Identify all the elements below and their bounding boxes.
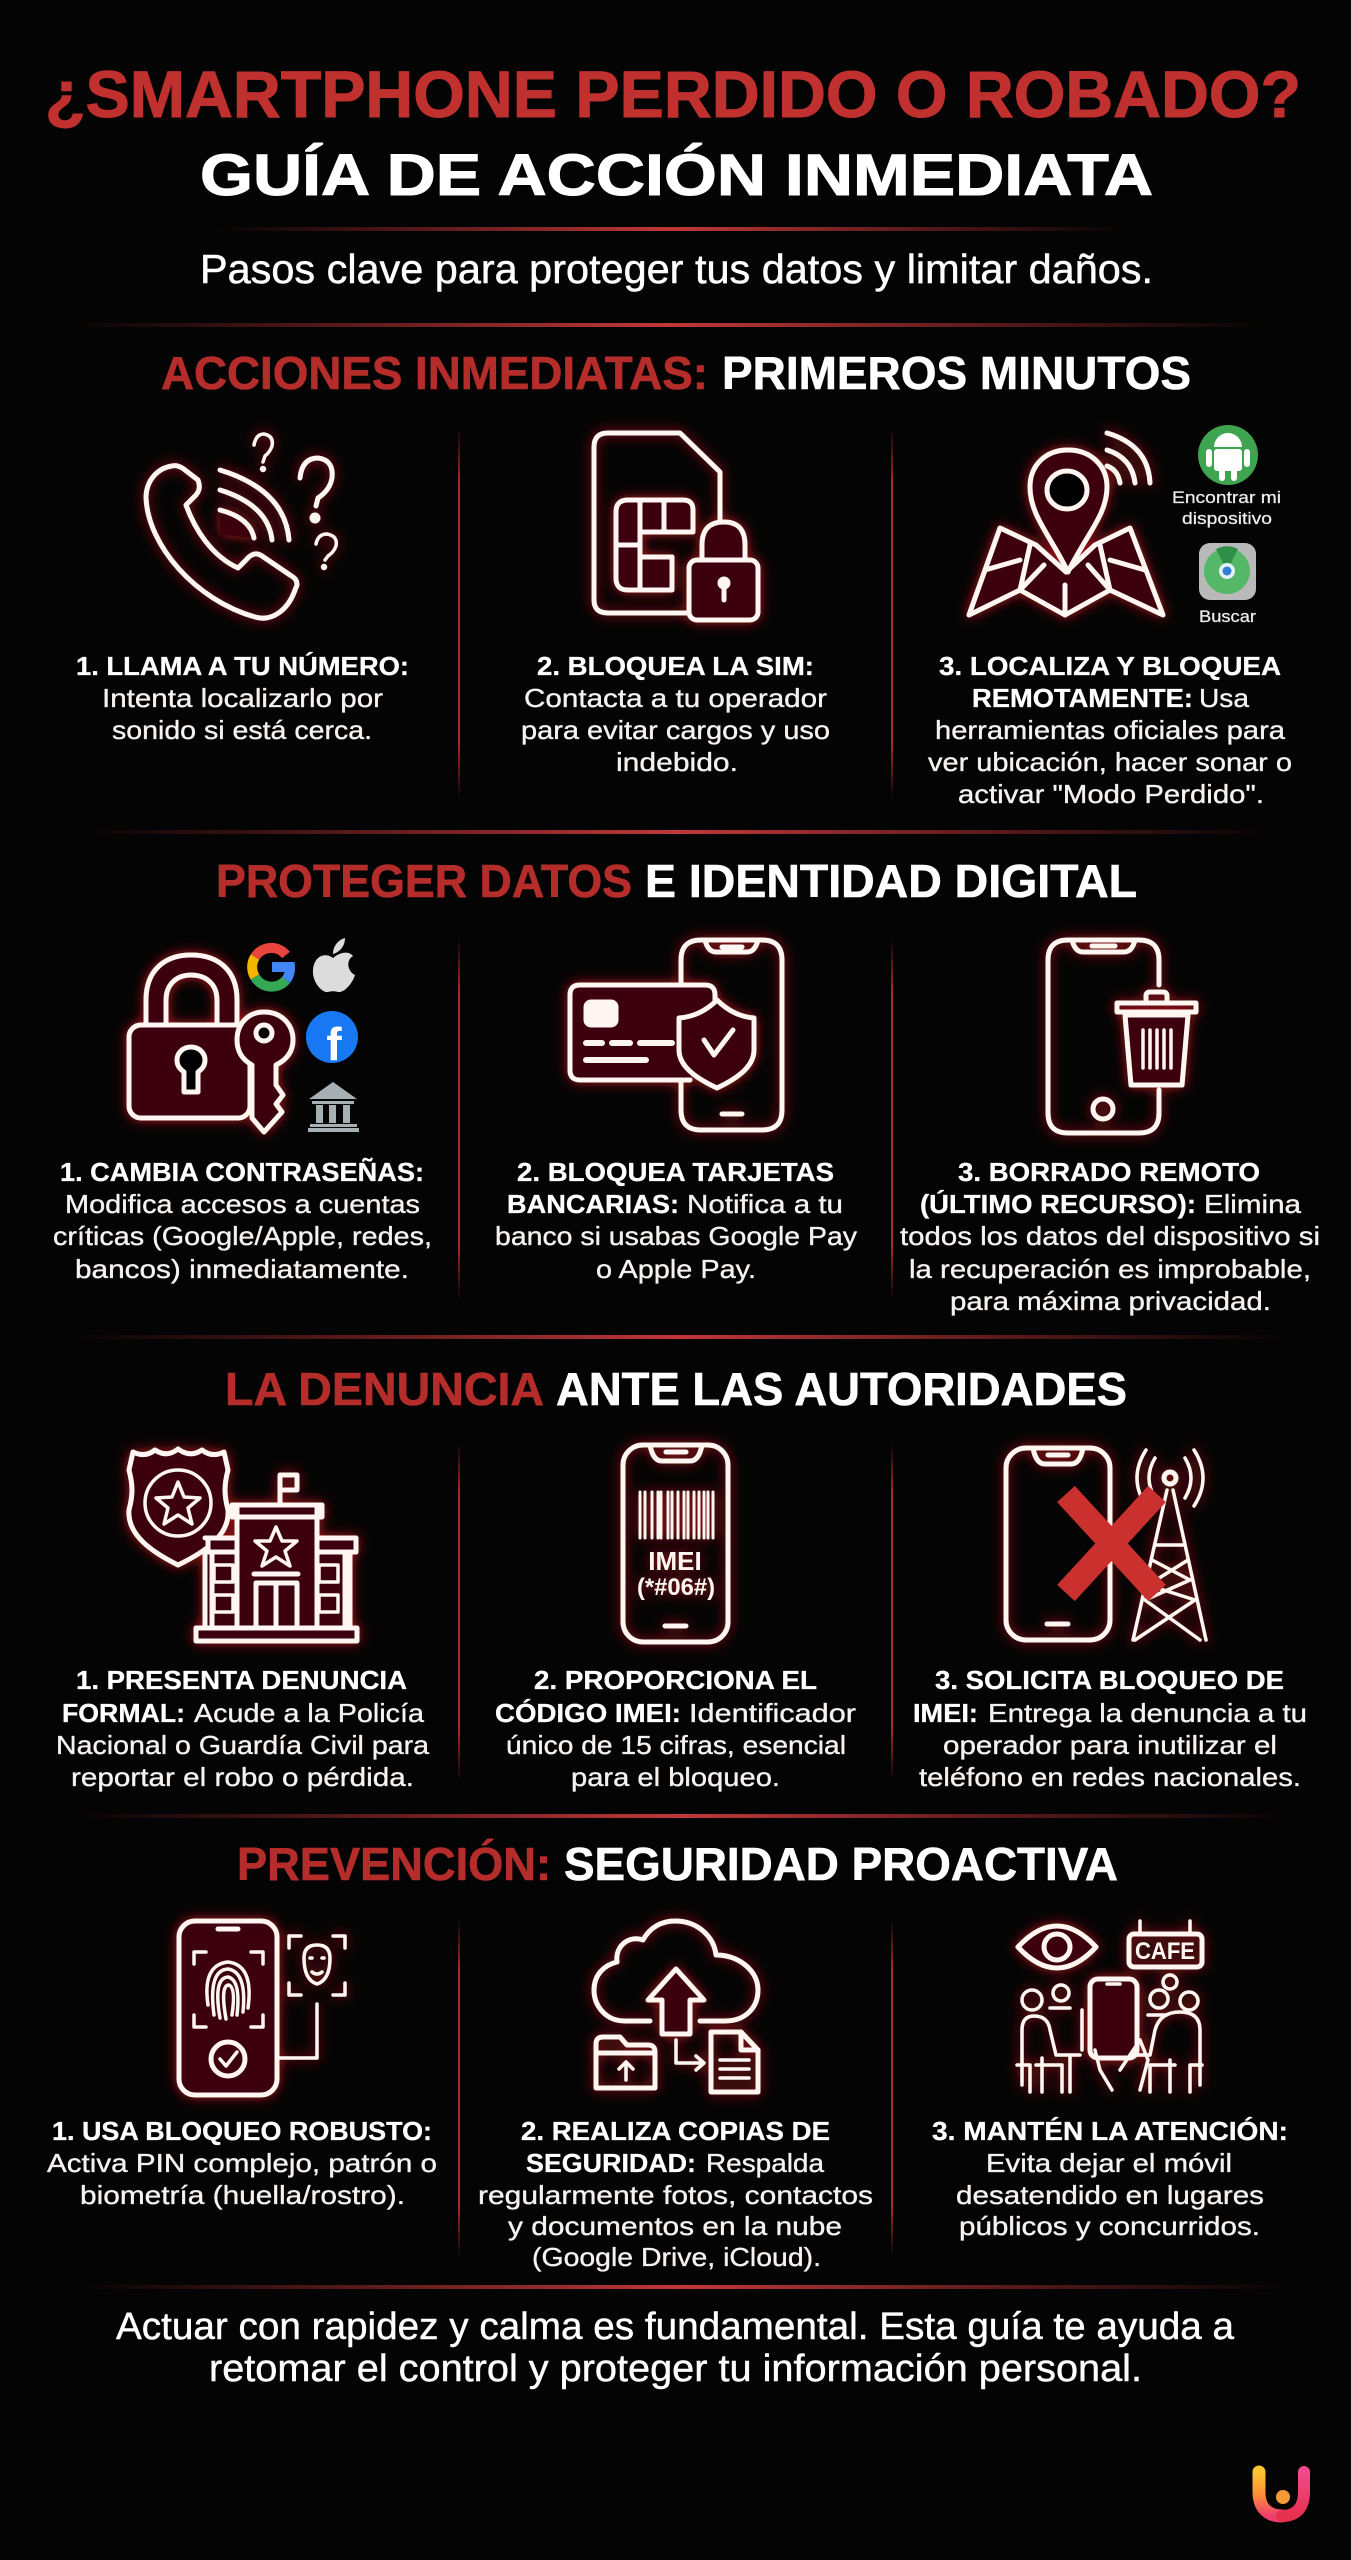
text: bloqueo robusto (47, 2116, 437, 2210)
step: bloquea la sim (521, 433, 830, 777)
text: mantén la atención: 3. MANTÉN LA ATENCIÓN: (932, 2116, 1288, 2146)
text: bloquea tarjetas: o Apple Pay. (596, 1254, 756, 1284)
text: bloquea tarjetas: 2. BLOQUEA TARJETAS (517, 1157, 834, 1187)
text: localiza y bloquea: Usa (1199, 683, 1250, 713)
icon: map pin with signal (969, 433, 1163, 615)
step: mantén la atención (932, 1921, 1288, 2241)
logo (1259, 2472, 1304, 2516)
text: presenta denuncia: reportar el robo o pérdida. (71, 1762, 414, 1792)
icon: phone with biometrics (179, 1921, 345, 2095)
icon: find my device app (1198, 425, 1258, 485)
title: ¿SMARTPHONE PERDIDO O ROBADO? (45, 57, 1301, 131)
text: llama a tu número: sonido si está cerca. (112, 715, 372, 745)
icon: police badge and station (129, 1449, 357, 1641)
heading: acciones inmediatas (161, 347, 1191, 399)
text: solicita bloqueo: IMEI: (913, 1698, 978, 1728)
text: borrado remoto (900, 1157, 1320, 1316)
closing text (116, 2306, 1235, 2390)
text: bloquea la sim: para evitar cargos y uso (521, 715, 830, 745)
step: localiza y bloquea (928, 425, 1292, 809)
icon: red cross (1066, 1494, 1157, 1593)
panel: prevención (47, 1838, 1288, 2272)
text: solicita bloqueo: operador para inutilizar el (943, 1730, 1277, 1760)
text: copias de seguridad: SEGURIDAD: (526, 2148, 696, 2178)
text: copias de seguridad (478, 2116, 873, 2272)
text: bloquea la sim (521, 651, 830, 777)
text: localiza y bloquea: 3. LOCALIZA Y BLOQUEA (939, 651, 1281, 681)
text: proporciona imei: Identificador (689, 1698, 856, 1728)
heading: prevención (237, 1838, 1118, 1890)
text: copias de seguridad: Respalda (706, 2148, 825, 2178)
text: copias de seguridad: y documentos en la nube (508, 2211, 842, 2241)
label: encontrar mi dispositivo: dispositivo (1182, 509, 1272, 528)
text: borrado remoto: (ÚLTIMO RECURSO): (920, 1189, 1196, 1219)
heading: proteger datos: E IDENTIDAD DIGITAL (645, 855, 1137, 907)
text: llama a tu número: 1. LLAMA A TU NÚMERO: (76, 651, 409, 681)
panel: la denuncia (56, 1363, 1307, 1792)
text: borrado remoto: la recuperación es improbable, (909, 1254, 1311, 1284)
text: llama a tu número: Intenta localizarlo por (102, 683, 383, 713)
title (45, 57, 1301, 208)
text: bloquea tarjetas: banco si usabas Google Pay (495, 1221, 857, 1251)
text: llama a tu número (76, 651, 409, 745)
text: proporciona imei: CÓDIGO IMEI: (495, 1698, 681, 1728)
heading: acciones inmediatas: ACCIONES INMEDIATAS: (161, 347, 708, 399)
heading: prevención: PREVENCIÓN: (237, 1838, 551, 1890)
text: copias de seguridad: (Google Drive, iCloud). (532, 2242, 821, 2272)
text: localiza y bloquea (928, 651, 1292, 809)
text: proporciona imei: para el bloqueo. (571, 1762, 780, 1792)
step: llama a tu número (76, 434, 409, 745)
step: cambia contraseñas (53, 938, 432, 1284)
text: mantén la atención: desatendido en lugares (956, 2180, 1264, 2210)
step: bloqueo robusto (47, 1921, 437, 2210)
text: bloqueo robusto: biometría (huella/rostro). (80, 2180, 405, 2210)
text: proporciona imei (495, 1665, 856, 1792)
icon: eye, cafe and people (1017, 1921, 1202, 2092)
step: solicita bloqueo (913, 1448, 1307, 1792)
text: localiza y bloquea: REMOTAMENTE: (972, 683, 1193, 713)
step: presenta denuncia (56, 1449, 430, 1792)
step: borrado remoto (900, 940, 1320, 1316)
icon: phone with imei barcode: IMEI (648, 1546, 702, 1576)
icon: facebook (306, 1011, 358, 1070)
text: localiza y bloquea: activar "Modo Perdido". (958, 779, 1264, 809)
icon: cloud backup (594, 1921, 758, 2092)
step: copias de seguridad (478, 1921, 873, 2272)
icon: phone, tower and red cross (1006, 1448, 1206, 1640)
icon: eye, cafe and people: CAFE (1135, 1938, 1195, 1965)
icon: phone with question marks (146, 434, 336, 618)
closing text: retomar el control y proteger tu información personal. (209, 2348, 1142, 2390)
text: solicita bloqueo: teléfono en redes nacionales. (919, 1762, 1301, 1792)
step: proporciona imei (495, 1445, 856, 1792)
text: presenta denuncia: FORMAL: (62, 1698, 185, 1728)
icon: bank (308, 1082, 359, 1132)
text: borrado remoto: para máxima privacidad. (950, 1286, 1271, 1316)
closing text: Actuar con rapidez y calma es fundamental. Esta guía te ayuda a (116, 2306, 1235, 2348)
text: borrado remoto: 3. BORRADO REMOTO (958, 1157, 1260, 1187)
label: buscar: Buscar (1199, 607, 1256, 626)
text: bloquea la sim: indebido. (616, 747, 738, 777)
icon: phone with imei barcode: (*#06#) (637, 1574, 715, 1601)
title: GUÍA DE ACCIÓN INMEDIATA (200, 143, 1153, 208)
icon: phone, card and shield (570, 940, 782, 1130)
text: bloqueo robusto: Activa PIN complejo, patrón o (47, 2148, 437, 2178)
panel: proteger datos (53, 855, 1320, 1316)
text: borrado remoto: Elimina (1204, 1189, 1302, 1219)
text: presenta denuncia: 1. PRESENTA DENUNCIA (76, 1665, 407, 1695)
heading: la denuncia: LA DENUNCIA (225, 1363, 544, 1415)
text: bloquea la sim: Contacta a tu operador (524, 683, 827, 713)
text: bloquea tarjetas: Notifica a tu (687, 1189, 843, 1219)
panel: acciones inmediatas (76, 347, 1292, 809)
text: bloquea tarjetas: BANCARIAS: (507, 1189, 679, 1219)
text: proporciona imei: único de 15 cifras, esencial (506, 1730, 846, 1760)
text: solicita bloqueo: Entrega la denuncia a tu (988, 1698, 1307, 1728)
heading: acciones inmediatas: PRIMEROS MINUTOS (722, 347, 1191, 399)
step: bloquea tarjetas (495, 940, 857, 1284)
label: encontrar mi dispositivo: Encontrar mi (1172, 488, 1281, 507)
text: presenta denuncia: Acude a la Policía (194, 1698, 425, 1728)
icon: google (252, 948, 290, 987)
icon: apple (313, 938, 355, 992)
text: presenta denuncia: Nacional o Guardía Civil para (56, 1730, 430, 1760)
text: copias de seguridad: regularmente fotos, contactos (478, 2180, 873, 2210)
icon: phone with trash can (1048, 940, 1196, 1133)
text: proporciona imei: 2. PROPORCIONA EL (534, 1665, 817, 1695)
text: borrado remoto: todos los datos del dispositivo si (900, 1221, 1320, 1251)
text: solicita bloqueo (913, 1665, 1307, 1792)
icon: facebook: f (326, 1018, 342, 1070)
label: encontrar mi dispositivo (1172, 488, 1281, 528)
text: bloqueo robusto: 1. USA BLOQUEO ROBUSTO: (52, 2116, 432, 2146)
text: cambia contraseñas: bancos) inmediatamente. (75, 1254, 409, 1284)
text: presenta denuncia (56, 1665, 430, 1792)
text: cambia contraseñas (53, 1157, 432, 1284)
subtitle: Pasos clave para proteger tus datos y limitar daños. (200, 246, 1153, 292)
heading: proteger datos: PROTEGER DATOS (216, 855, 632, 907)
heading: la denuncia: ANTE LAS AUTORIDADES (556, 1363, 1127, 1415)
text: copias de seguridad: 2. REALIZA COPIAS DE (521, 2116, 830, 2146)
heading: proteger datos (216, 855, 1137, 907)
text: mantén la atención (932, 2116, 1288, 2241)
text: localiza y bloquea: herramientas oficiales para (935, 715, 1286, 745)
text: localiza y bloquea: ver ubicación, hacer sonar o (928, 747, 1292, 777)
text: cambia contraseñas: Modifica accesos a cuentas (65, 1189, 420, 1219)
text: mantén la atención: públicos y concurridos. (959, 2211, 1260, 2241)
text: mantén la atención: Evita dejar el móvil (986, 2148, 1232, 2178)
icon: find app (1199, 543, 1256, 600)
text: bloquea la sim: 2. BLOQUEA LA SIM: (537, 651, 814, 681)
icon: sim card with padlock (594, 433, 758, 620)
icon: padlock and key (129, 955, 293, 1132)
text: solicita bloqueo: 3. SOLICITA BLOQUEO DE (935, 1665, 1284, 1695)
text: cambia contraseñas: críticas (Google/Apple, redes, (53, 1221, 432, 1251)
icon: phone with imei barcode (623, 1445, 728, 1642)
heading: prevención: SEGURIDAD PROACTIVA (564, 1838, 1118, 1890)
text: bloquea tarjetas (495, 1157, 857, 1284)
heading: la denuncia (225, 1363, 1127, 1415)
text: cambia contraseñas: 1. CAMBIA CONTRASEÑAS: (60, 1157, 424, 1187)
